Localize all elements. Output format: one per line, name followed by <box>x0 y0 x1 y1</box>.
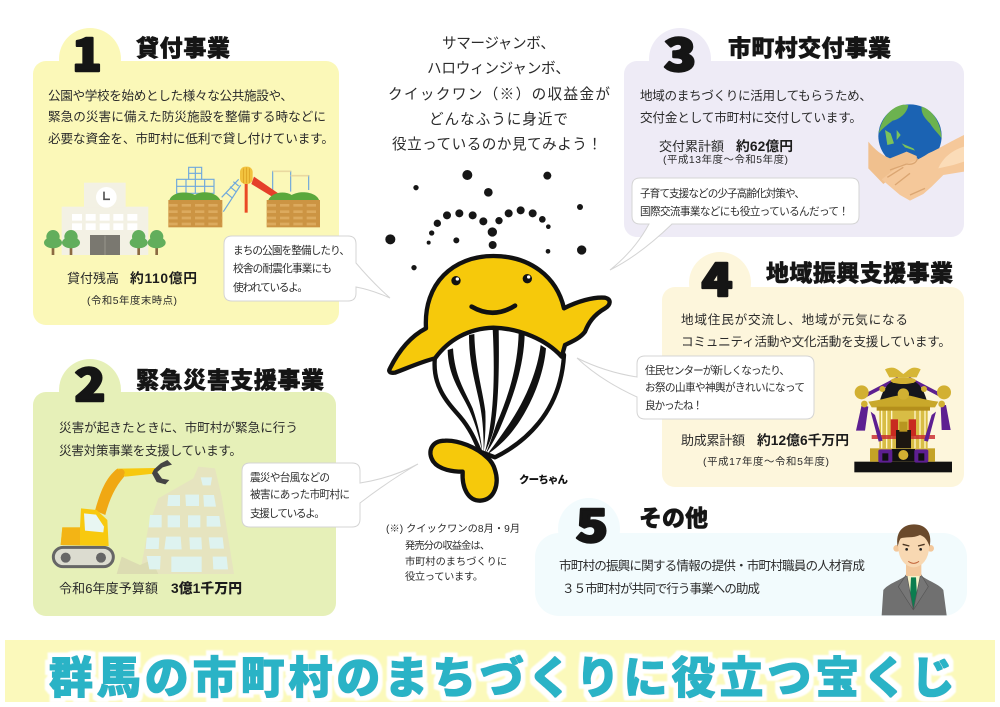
icon: playground <box>168 167 320 227</box>
footnote: (※) クイックワンの8月・9月 <box>386 523 520 535</box>
intro text <box>388 35 610 153</box>
statistic: cumulative grants: (平成13年度～令和5年度) <box>663 153 788 166</box>
statistic: loan balance: 約110億円 <box>130 270 197 286</box>
body text: other programs <box>559 558 865 596</box>
callout: parks and school retrofits: 校舎の耐震化事業にも <box>233 262 332 275</box>
statistic: cumulative grants: 約62億円 <box>736 138 793 154</box>
heading: municipal grants: 市町村交付事業 <box>728 35 891 61</box>
body text: municipal grants: 交付金として市町村に交付しています。 <box>640 111 862 125</box>
number 4: 4 <box>702 245 732 309</box>
footnote: 役立っています。 <box>405 570 483 583</box>
body text: loan program <box>48 88 334 146</box>
body text: loan program: 公園や学校を始めとした様々な公共施設や、 <box>48 88 293 103</box>
icon: man in a suit <box>882 524 947 615</box>
number 5: 5 <box>576 491 608 555</box>
water spout dots <box>385 170 586 270</box>
statistic: cumulative subsidies: 助成累計額 <box>681 433 745 448</box>
banner title: 群馬の市町村のまちづくりに役立つ宝くじ <box>49 654 955 703</box>
body text: municipal grants: 地域のまちづくりに活用してもらうため、 <box>640 89 872 103</box>
statistic: loan balance: (令和5年度末時点) <box>87 294 177 307</box>
intro text: サマージャンボ、 <box>442 35 555 52</box>
panel 3: municipal grants <box>610 20 964 270</box>
statistic: cumulative subsidies: (平成17年度～令和5年度) <box>703 455 829 468</box>
callout: community centre and festival floats: 住民センターが新しくなったり、 <box>645 364 790 377</box>
body text: loan program: 緊急の災害に備えた防災施設を整備する時などに <box>48 109 326 124</box>
intro text: ハロウィンジャンボ、 <box>427 60 570 77</box>
callout: parks and school retrofits <box>224 236 390 301</box>
whale head and fins <box>389 256 610 373</box>
callout: childcare and international exchange <box>610 178 859 270</box>
callout: disaster-hit municipalities <box>242 463 418 527</box>
mascot: whale Qoo-chan <box>385 170 610 501</box>
callout: parks and school retrofits: 使われているよ。 <box>233 281 308 294</box>
callout: parks and school retrofits: まちの公園を整備したり、 <box>233 244 350 257</box>
footnote: 市町村のまちづくりに <box>405 555 507 568</box>
body text: other programs: 市町村の振興に関する情報の提供・市町村職員の人材育成 <box>559 558 865 573</box>
callout: community centre and festival floats: お祭の山車や神輿がきれいになって <box>645 381 805 394</box>
panel 1: loan program <box>33 21 390 325</box>
body text: other programs: ３５市町村が共同で行う事業への助成 <box>562 581 760 596</box>
intro text: クイックワン（※）の収益金が <box>388 86 610 103</box>
statistic: loan balance: 貸付残高 <box>67 271 119 286</box>
whale face <box>451 274 532 313</box>
body text: disaster support: 災害対策事業を支援しています。 <box>59 443 242 458</box>
callout: community centre and festival floats <box>577 356 814 419</box>
body text: regional promotion: コミュニティ活動や文化活動を支援しています。 <box>681 335 951 349</box>
body text: regional promotion <box>681 312 951 349</box>
statistic: budget <box>59 580 242 596</box>
body text: loan program: 必要な資金を、市町村に低利で貸し付けています。 <box>48 131 334 146</box>
statistic: loan balance <box>67 270 197 307</box>
body text: disaster support: 災害が起きたときに、市町村が緊急に行う <box>59 420 298 435</box>
intro text: どんなふうに身近で <box>429 111 568 128</box>
mascot name: クーちゃん <box>519 473 568 486</box>
footnote: 発売分の収益金は、 <box>405 539 490 552</box>
heading: loan program: 貸付事業 <box>136 35 230 61</box>
heading: disaster support: 緊急災害支援事業 <box>136 367 324 393</box>
panel 4: regional promotion <box>577 245 964 487</box>
belly stripes <box>448 328 546 455</box>
number 3: 3 <box>664 20 696 84</box>
body text: regional promotion: 地域住民が交流し、地域が元気になる <box>681 312 908 327</box>
statistic: budget: 令和6年度予算額 <box>59 581 158 596</box>
callout: childcare and international exchange: 子育て支援などの少子高齢化対策や、 <box>640 187 805 200</box>
callout: childcare and international exchange: 国際交流事業などにも役立っているんだって！ <box>640 205 849 218</box>
whale tail <box>430 441 497 501</box>
icon: school building <box>44 183 166 255</box>
icon: mikoshi portable shrine <box>854 368 952 472</box>
heading: other programs: その他 <box>639 505 708 531</box>
icon: excavator <box>53 460 172 567</box>
statistic: cumulative grants: 交付累計額 <box>659 139 724 154</box>
callout: disaster-hit municipalities: 支援しているよ。 <box>250 507 325 520</box>
intro text: 役立っているのか見てみよう！ <box>392 136 602 153</box>
statistic: cumulative subsidies <box>681 432 849 468</box>
number 1: 1 <box>72 21 102 84</box>
callout: disaster-hit municipalities: 震災や台風などの <box>250 471 330 484</box>
panel 2: disaster support <box>33 350 418 616</box>
statistic: cumulative grants <box>659 138 793 166</box>
footnote <box>386 523 520 583</box>
callout: disaster-hit municipalities: 被害にあった市町村に <box>250 488 350 501</box>
panel 5: other programs <box>535 491 967 616</box>
body text: municipal grants <box>640 89 872 125</box>
statistic: cumulative subsidies: 約12億6千万円 <box>757 432 849 448</box>
statistic: budget: 3億1千万円 <box>171 580 242 596</box>
body text: disaster support <box>59 420 298 458</box>
heading: regional promotion: 地域振興支援事業 <box>766 260 953 286</box>
icon: globe and handshake <box>868 104 964 201</box>
whale belly <box>435 326 564 457</box>
icon: damaged building <box>117 467 234 574</box>
number 2: 2 <box>75 350 105 414</box>
callout: community centre and festival floats: 良かったね！ <box>645 399 703 412</box>
